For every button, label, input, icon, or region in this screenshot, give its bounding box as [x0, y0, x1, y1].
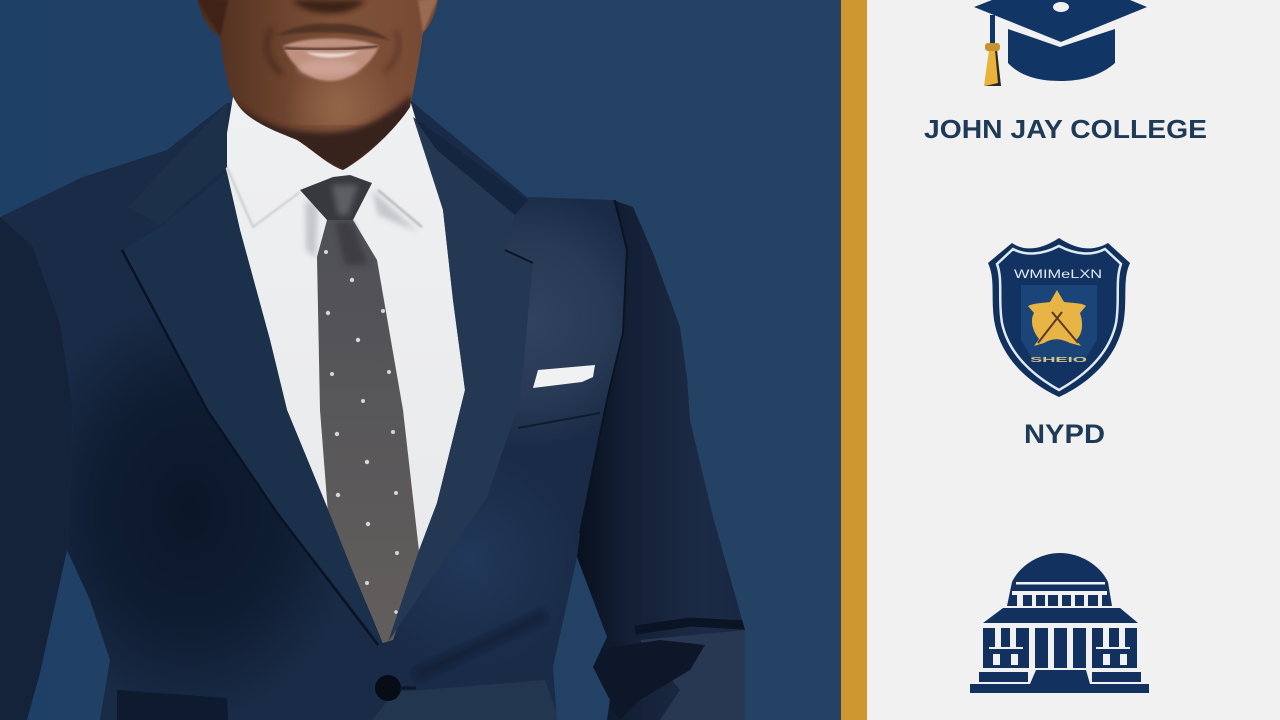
affiliation: NYPD — [988, 238, 1130, 449]
left lapel — [122, 173, 382, 644]
label: John Jay College: JOHN JAY COLLEGE — [924, 114, 1207, 144]
lower lip highlight — [298, 60, 358, 76]
roof — [983, 608, 1138, 623]
lower pocket — [117, 690, 228, 720]
drum windows and ledge — [1012, 582, 1107, 606]
nose shadow — [292, 0, 366, 14]
left collar of jacket — [128, 103, 227, 225]
left collar outline — [226, 165, 300, 227]
pocket square — [533, 365, 595, 388]
facade wall — [983, 628, 1137, 668]
icon: police shield: SHEIO — [1030, 357, 1088, 364]
steps — [979, 670, 1141, 684]
jacket torso — [0, 90, 660, 720]
jacket button — [375, 675, 401, 701]
neck and face — [198, 0, 438, 170]
affiliation: John Jay College — [924, 0, 1207, 144]
teeth — [306, 51, 358, 58]
icon: police shield: WMIMeLXN — [1014, 267, 1102, 281]
dome — [1007, 553, 1112, 606]
right lapel — [388, 117, 533, 642]
right collar tip — [378, 190, 422, 227]
right collar of jacket — [413, 117, 528, 215]
label: NYPD: NYPD — [1024, 419, 1105, 449]
lips — [283, 38, 379, 81]
shirt — [223, 80, 465, 643]
columns — [989, 628, 1130, 668]
button strap — [400, 686, 416, 690]
right sleeve — [577, 200, 745, 720]
left lapel seam — [122, 250, 378, 645]
base — [970, 684, 1149, 693]
mouth line — [284, 46, 378, 49]
chest pocket — [518, 413, 600, 428]
panel: affiliations background — [867, 0, 1280, 720]
icon: graduation cap — [974, 0, 1147, 86]
icon: police shield — [988, 238, 1130, 397]
icon: domed university building — [970, 553, 1149, 693]
arm seam — [580, 200, 627, 533]
necktie — [300, 175, 420, 643]
moustache — [276, 24, 390, 40]
right lapel notch — [505, 250, 533, 263]
portrait of man in navy suit — [0, 0, 760, 720]
shirt shadows and folds — [305, 190, 418, 258]
panel: navy portrait background — [0, 0, 841, 720]
left sleeve — [0, 217, 73, 720]
gold divider bar — [841, 0, 867, 720]
